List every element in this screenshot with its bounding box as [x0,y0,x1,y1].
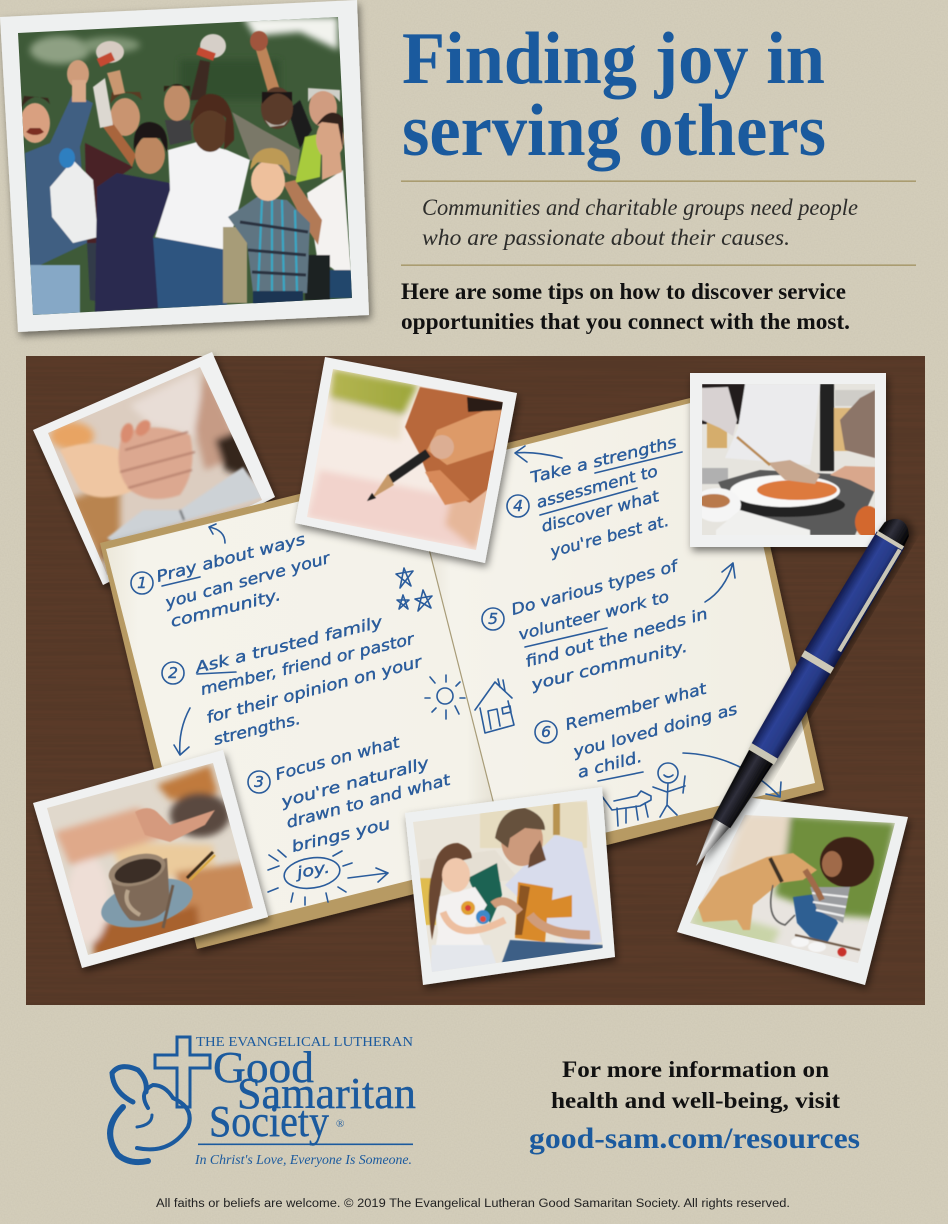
title: serving others [402,90,826,172]
left page [106,474,507,932]
intro italic text: Communities and charitable groups need people [422,195,858,220]
tip 4: assessment to [534,462,660,512]
right woman [306,170,351,271]
tip 4: you're best at. [547,512,671,561]
logo cross [155,1037,210,1107]
logo text: Good [213,1043,314,1092]
intro italic text: who are passionate about their causes. [422,225,790,250]
logo text [194,1034,416,1168]
khaki pants [223,227,247,303]
photo: girl with dog [677,795,908,985]
tip 1: 1 [137,574,147,592]
tip 5: 5 [488,610,498,628]
woman dress [95,173,177,312]
pen grip [710,747,775,830]
open notebook [100,387,824,949]
second rule [401,264,916,266]
intro italic text [422,195,858,250]
arrow to dog photo [683,753,781,797]
doodle: sun [425,675,465,719]
man 2 [85,143,133,243]
photo: serving food [690,373,886,547]
raised dark arm [190,60,210,100]
logo: Good Samaritan Society [110,1034,416,1168]
photo: pencil on paper [295,357,517,563]
page fold [410,474,507,856]
man [505,835,602,948]
tip 2: Ask a trusted family [192,613,385,677]
tip 3: you're naturally [278,754,432,811]
arrow to guitar photo [348,868,388,882]
notebook tips right page [482,433,739,782]
arm around [283,180,322,245]
pen clip [838,549,901,652]
tip 3: 3 [254,773,264,791]
photo: volunteers group [0,0,369,332]
tip 3: Focus on what [273,733,403,784]
tip 1 [131,530,334,631]
photo: coffee and conversation [33,750,268,968]
tip 3 [248,733,453,882]
tip 2: strengths. [212,710,302,749]
tip 3: joy. [293,858,331,882]
tip 6: 6 [541,723,551,741]
tip 4: discover what [539,487,662,536]
photo: praying hands on bible [33,352,275,585]
tip 1: you can serve your [162,549,334,612]
lower barrel [748,654,832,763]
tip 6 [535,679,739,782]
arrow to praying photo [209,524,225,543]
tip 6: you loved doing as [570,700,739,761]
tip 1: community. [169,586,283,631]
more information callout: For more information on [562,1057,829,1082]
logo text: THE EVANGELICAL LUTHERAN [196,1034,413,1049]
joy doodle [268,850,352,905]
title [402,18,826,172]
bag [50,160,98,243]
logo text: Samaritan [237,1069,416,1118]
pen tip [688,818,729,871]
tip 6: a child. [575,748,644,782]
more information callout: good-sam.com/resources [529,1122,860,1155]
tip 5 [482,556,710,694]
tip 4: 4 [513,497,523,515]
arrow to food photo [705,563,735,602]
man 3 [165,120,192,145]
tip 4 [507,433,682,561]
doodle: dog [601,791,651,826]
pen cap end [878,513,915,546]
arrow to coffee photo [174,708,190,755]
center woman [155,142,250,250]
tip 5: find out the needs in [523,605,710,671]
upper barrel [803,531,905,671]
logo figures [110,1067,190,1162]
logo text: Society [209,1097,329,1146]
tip 3: drawn to and what [284,770,453,832]
doodles and arrows [174,446,781,905]
more information callout [529,1057,860,1155]
tip 6: Remember what [563,679,709,734]
tips intro text: Here are some tips on how to discover service [401,279,846,304]
grey man [309,89,337,127]
tip 5: volunteer work to [516,588,671,644]
arrow to pencil photo [515,446,562,462]
logo text: ® [336,1118,344,1130]
big man [232,112,300,177]
more information callout: health and well-being, visit [551,1088,840,1113]
doodle: stars [396,568,432,611]
girl [436,886,488,945]
footer note: All faiths or beliefs are welcome. © 2019 The Evangelical Lutheran Good Samaritan Society. All rights reserved. [156,1198,790,1210]
tip 2: member, friend or pastor [199,629,418,699]
doodle: stick figure [653,763,685,817]
center woman jeans [150,238,227,308]
tip 4: Take a strengths [529,433,679,487]
tip 3: brings you [290,815,392,856]
boy [228,197,310,293]
logo text: In Christ's Love, Everyone Is Someone. [194,1153,412,1168]
tip 2: for their opinion on your [204,652,425,727]
right page [410,393,815,856]
fountain pen [681,512,916,875]
tip 5: Do various types of [509,556,682,619]
top rule [401,180,916,182]
photo: father and daughter with guitar [405,787,615,985]
tip 5: your community. [528,638,689,694]
title: Finding joy in [402,18,825,100]
tips intro text: opportunities that you connect with the most. [401,309,850,334]
notebook tips left page [131,530,453,882]
tip 2: 2 [168,664,178,682]
tips intro text [401,279,850,334]
tip 1: Pray about ways [154,530,307,586]
wooden table panel [26,356,925,1005]
left man [25,93,93,270]
notebook cover [100,387,824,949]
doodle: house [475,679,514,733]
tip 2 [162,613,425,749]
